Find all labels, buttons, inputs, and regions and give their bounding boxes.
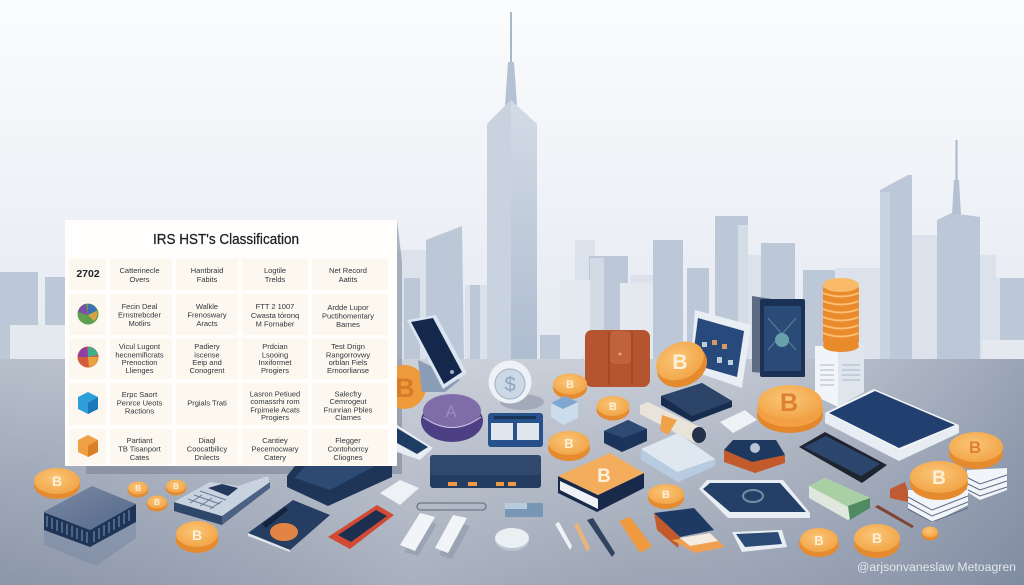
row 1: 2702 <box>76 268 100 280</box>
row 3: iscense <box>194 350 220 360</box>
dark book with glow <box>248 500 330 552</box>
book with coin mark: B <box>597 466 611 487</box>
row 3: Test Drign <box>331 342 365 351</box>
row 1: Net Record <box>329 266 367 275</box>
row 2: Aracts <box>196 319 218 328</box>
wallet <box>585 330 650 387</box>
row 3: Llienges <box>126 366 154 375</box>
white sticks <box>400 513 470 559</box>
row 3: Inxiformet <box>259 358 292 367</box>
purple button <box>421 394 483 442</box>
calculator <box>174 476 270 525</box>
coin: tilted: B <box>672 351 688 374</box>
row 3: Vicul Lugont <box>119 342 161 351</box>
white tile <box>380 480 419 505</box>
right spire <box>952 140 961 214</box>
coin: small wallet side <box>553 374 587 399</box>
row 2 <box>78 302 374 329</box>
coin: big book side: B <box>662 489 670 501</box>
row 4: comassrhi rom <box>250 397 300 406</box>
dark box behind panel <box>287 466 392 506</box>
pen right <box>875 505 914 528</box>
purple button: A <box>445 402 457 421</box>
row 1: Fabits <box>197 275 217 284</box>
coin: big book side <box>648 484 684 509</box>
row 5: Cantiey <box>262 436 288 445</box>
row 3: Ernoorlianse <box>327 366 369 375</box>
row 2: Frenoswary <box>187 310 227 320</box>
dark orange box <box>724 440 785 473</box>
book with coin mark <box>558 453 644 512</box>
coin: below calculator <box>176 521 218 553</box>
dark tall box device <box>752 296 805 377</box>
row 1: Catterinecle <box>119 266 160 275</box>
icon: multicolor sphere <box>78 304 98 324</box>
row 5: Pecemocwary <box>251 444 299 454</box>
row 4: Lasron Petiued <box>250 390 300 398</box>
row 2: Ardde Lupor <box>327 303 369 312</box>
coins: small bottom left: B <box>135 484 141 493</box>
row 5: Flegger <box>335 436 361 445</box>
row 2: Walkle <box>196 302 218 311</box>
row 1: Aatits <box>339 275 358 284</box>
row 1: Logtile <box>264 266 286 275</box>
row 4: Frpimele Acats <box>250 406 300 414</box>
coin: mid row <box>548 431 590 461</box>
white tablet on stand <box>690 310 751 388</box>
coin: right upper: B <box>969 438 981 457</box>
coins: bottom right: B <box>814 533 824 548</box>
row 4 <box>78 390 373 422</box>
row 3: Prenoction <box>122 358 157 367</box>
row 3: hecnemificrats <box>115 350 164 360</box>
main tower <box>487 12 537 360</box>
small blue connector <box>505 503 543 517</box>
icon: orange cube <box>78 435 98 457</box>
coin stack tower <box>823 278 859 352</box>
keypad device <box>397 425 433 460</box>
row 2: Ernstrebcder <box>118 310 161 320</box>
coin: middle <box>596 396 630 420</box>
background sky <box>0 0 1024 360</box>
white disc <box>495 528 529 551</box>
coin: cut behind table <box>382 365 426 409</box>
coin: right lower <box>910 461 968 500</box>
coins: bottom right <box>799 524 938 558</box>
row 3: Lsooing <box>262 350 288 360</box>
row 5: Partiant <box>127 436 153 445</box>
row 2: Barnes <box>336 320 360 329</box>
dark router <box>430 455 541 488</box>
coin: tilted <box>650 334 714 395</box>
coin: bottom left big <box>34 468 80 499</box>
row 3: Rangorrovwy <box>326 350 370 360</box>
table floor <box>0 359 1024 585</box>
row 4: Prgials Trati <box>187 398 227 408</box>
skyline mid layer <box>0 175 1024 360</box>
row 5: Coocatbilicy <box>187 444 227 454</box>
table cells <box>69 258 388 465</box>
coins: bottom right: B <box>872 530 882 546</box>
black phone <box>799 432 887 483</box>
coin: right lower: B <box>932 468 946 489</box>
coin: middle: B <box>609 401 617 413</box>
row 4: Cemrogeut <box>329 397 367 406</box>
small tablet <box>732 530 787 552</box>
row 4: Salecfry <box>334 390 362 398</box>
skyline light details <box>10 192 1024 360</box>
coin: cut behind table: B <box>395 373 415 403</box>
coin: small wallet side: B <box>566 379 574 391</box>
icon: colourful blob <box>78 346 98 368</box>
skyline far layer <box>65 235 1024 360</box>
row 5: Cates <box>130 453 150 462</box>
row 3: Conogrent <box>189 366 225 375</box>
coins: small bottom left: B <box>173 482 179 491</box>
white server tower <box>815 345 864 407</box>
row 5: Contohorrcy <box>328 444 369 454</box>
row 2: M Fornaber <box>256 320 295 328</box>
row 1 <box>76 266 367 284</box>
panel: classification table <box>65 220 397 466</box>
row 1: Trelds <box>265 275 286 284</box>
row 2: Fecin Deal <box>122 302 158 311</box>
heading: IRS HST's Classification <box>153 232 299 248</box>
panel shadow <box>86 220 402 474</box>
white router <box>641 433 715 482</box>
row 4: Progiers <box>261 413 289 422</box>
small blue cube <box>551 396 578 425</box>
red phone <box>328 505 394 549</box>
tablet bottom center <box>699 480 810 518</box>
big tablet <box>825 389 959 461</box>
row 5: Cliognes <box>333 453 363 462</box>
row 2: Motlirs <box>128 319 151 328</box>
dark cube <box>604 420 647 452</box>
row 3: Progiers <box>261 366 289 375</box>
row 3: Padiery <box>194 342 220 351</box>
red book and paper stacks <box>890 468 1007 523</box>
coin stack large: B <box>780 389 798 417</box>
row 3: Prdcian <box>262 342 288 351</box>
pens <box>555 518 615 557</box>
tube device <box>640 402 706 443</box>
row 4: Clarnes <box>335 413 361 422</box>
row 2: Puctihomentary <box>322 312 374 320</box>
coin: mid row: B <box>564 436 574 451</box>
silver dollar coin <box>488 360 544 410</box>
silver dollar coin: $ <box>504 374 516 396</box>
row 3: orblan Fiels <box>329 358 368 367</box>
row 1: Hantbraid <box>191 266 223 275</box>
row 5: Dnlects <box>194 453 220 462</box>
row 4: Penrce Ueots <box>117 398 162 408</box>
coin: below calculator: B <box>192 527 202 543</box>
coins: small bottom left <box>128 480 186 512</box>
device: phone on stand <box>407 315 467 392</box>
coin: right upper <box>949 432 1003 469</box>
watermark: @arjsonvaneslaw Metoagren <box>857 562 1016 574</box>
row 2: Cwasta tóronq <box>251 311 299 320</box>
row 5 <box>78 435 369 462</box>
open box <box>654 508 725 553</box>
orange stick <box>619 517 652 553</box>
coins: small bottom left: B <box>154 498 160 507</box>
coin stack large <box>757 385 823 433</box>
blue tray <box>488 413 543 447</box>
row 4: Ractions <box>125 406 154 416</box>
row 5: TB Tisanport <box>118 444 162 454</box>
dark flat box <box>661 383 732 422</box>
icon: blue cube <box>78 392 98 414</box>
row 5: Catery <box>264 453 286 462</box>
panel background <box>65 220 397 466</box>
white keypad <box>720 410 757 433</box>
row 4: Frunrian Pbles <box>324 406 373 414</box>
cable <box>417 503 486 510</box>
row 1: Overs <box>129 275 150 284</box>
server bottom left <box>43 486 136 566</box>
green package <box>809 478 870 520</box>
row 3: Eeip and <box>192 358 222 367</box>
row 3 <box>78 342 370 375</box>
row 2: FTT 2 1007 <box>256 302 294 311</box>
row 4: Erpc Saort <box>122 390 158 399</box>
coin: bottom left big: B <box>52 473 62 489</box>
row 5: Diaql <box>198 436 216 445</box>
